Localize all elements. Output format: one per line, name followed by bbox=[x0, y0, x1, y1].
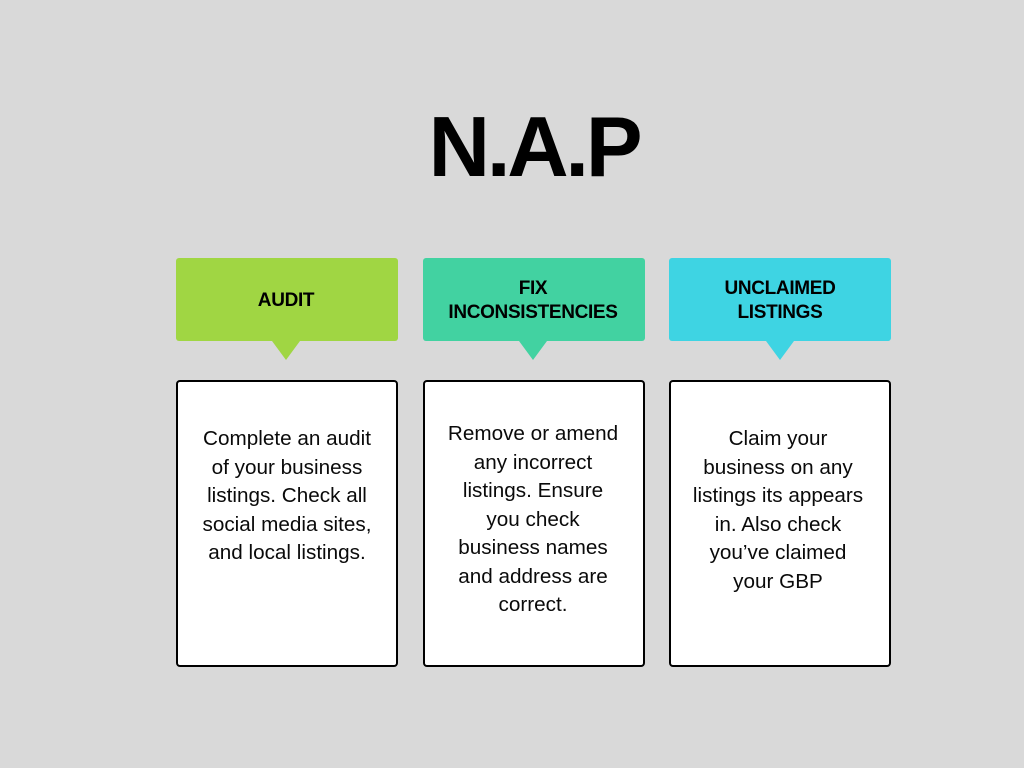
fix description: business names bbox=[458, 536, 608, 559]
audit description: social media sites, bbox=[202, 512, 372, 536]
audit pointer bbox=[272, 341, 300, 360]
fix heading: INCONSISTENCIES bbox=[448, 302, 618, 323]
unclaimed description bbox=[693, 427, 863, 592]
panel: fix inconsistencies header bbox=[423, 258, 645, 341]
panel: audit text box bbox=[176, 380, 398, 667]
panel: unclaimed listings header bbox=[669, 258, 891, 341]
fix heading: FIX bbox=[519, 278, 547, 299]
audit description bbox=[202, 427, 372, 564]
unclaimed heading: UNCLAIMED bbox=[724, 278, 836, 299]
unclaimed heading: LISTINGS bbox=[738, 302, 822, 323]
fix description: Remove or amend bbox=[448, 422, 618, 445]
fix pointer bbox=[519, 341, 547, 360]
unclaimed description: you’ve claimed bbox=[710, 541, 846, 564]
title: N.A.P bbox=[429, 100, 639, 195]
unclaimed heading bbox=[724, 278, 836, 323]
audit heading: AUDIT bbox=[258, 290, 314, 311]
audit description: Complete an audit bbox=[203, 427, 371, 450]
unclaimed pointer bbox=[766, 341, 794, 360]
panel: unclaimed text box bbox=[669, 380, 891, 667]
panel: fix text box bbox=[423, 380, 645, 667]
panel: audit header bbox=[176, 258, 398, 341]
fix description: you check bbox=[486, 508, 580, 530]
unclaimed description: listings its appears bbox=[693, 484, 863, 507]
unclaimed description: business on any bbox=[703, 456, 853, 478]
fix description: and address are bbox=[458, 564, 608, 588]
fix heading bbox=[448, 278, 618, 323]
unclaimed description: in. Also check bbox=[715, 512, 841, 536]
audit description: of your business bbox=[212, 456, 362, 478]
unclaimed description: your GBP bbox=[733, 570, 823, 592]
fix description: any incorrect bbox=[474, 450, 592, 474]
fix description: listings. Ensure bbox=[463, 479, 603, 502]
fix description: correct. bbox=[498, 593, 567, 616]
unclaimed description: Claim your bbox=[729, 427, 827, 450]
audit description: and local listings. bbox=[208, 541, 366, 564]
audit description: listings. Check all bbox=[207, 484, 367, 507]
fix description bbox=[448, 422, 618, 616]
